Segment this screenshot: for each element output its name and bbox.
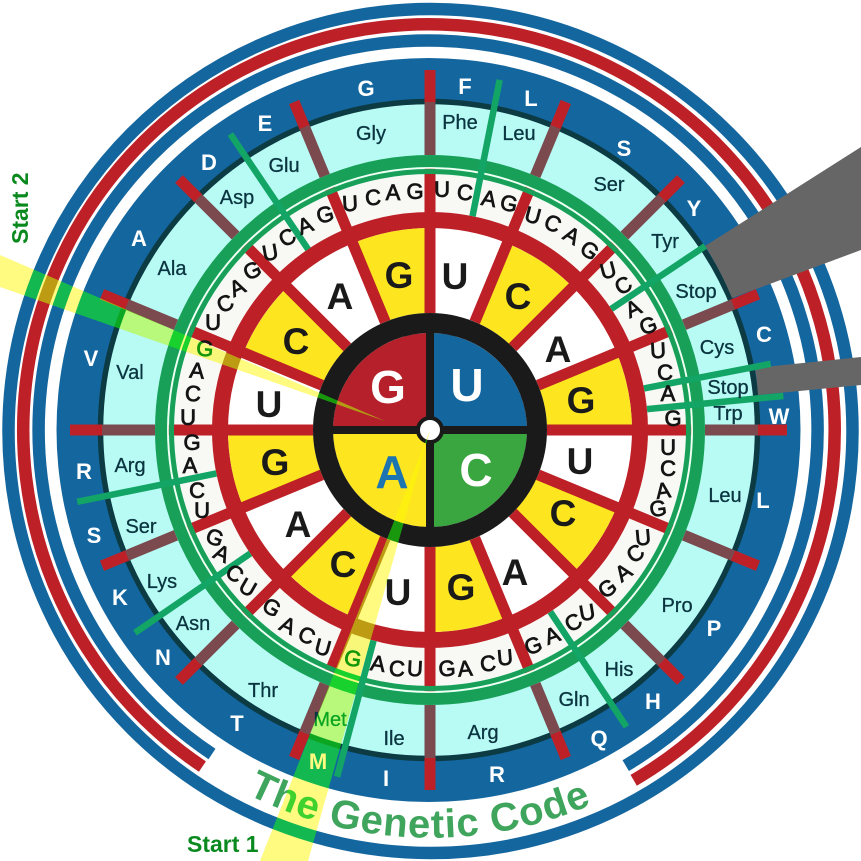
third base codon letters: A xyxy=(541,621,564,650)
single letter amino acid codes: S xyxy=(617,136,631,161)
yellow second base sectors xyxy=(197,197,663,663)
third base codon letters: C xyxy=(657,360,673,385)
amino acid names: Val xyxy=(116,362,144,384)
amino acid names: Arg xyxy=(114,455,146,477)
amino acid names: Tyr xyxy=(651,231,679,253)
third base codon letters: A xyxy=(457,655,474,682)
second base letters: A xyxy=(545,329,571,370)
amino acid names: Met xyxy=(313,709,347,731)
third base codon letters: U xyxy=(194,498,210,523)
third base codon letters: G xyxy=(183,430,201,455)
third base codon letters: U xyxy=(522,201,544,230)
third base codon letters: G xyxy=(593,573,621,604)
third base codon letters: A xyxy=(621,294,645,323)
single letter amino acid codes: W xyxy=(769,404,790,429)
third base codon letters: U xyxy=(434,177,450,202)
third base codon letters: G xyxy=(406,179,424,204)
second base letters: C xyxy=(330,544,356,585)
third base codon letters: A xyxy=(661,381,676,406)
single letter amino acid codes: D xyxy=(201,150,217,175)
single letter amino acid codes: A xyxy=(131,226,147,251)
amino acid names: Glu xyxy=(268,155,300,177)
amino acid names: Ile xyxy=(383,728,405,750)
amino acid names: Stop xyxy=(707,377,749,399)
center letters: A xyxy=(375,446,409,498)
amino acid names: Gln xyxy=(558,689,590,711)
cyan amino acid ring xyxy=(100,102,758,758)
third base codon letters: U xyxy=(406,656,424,681)
amino acid names: Asn xyxy=(176,613,210,635)
second base letters: C xyxy=(283,321,309,362)
center letters: G xyxy=(370,361,406,413)
third base codon letters: G xyxy=(498,189,520,217)
blue amino acid letter ring xyxy=(56,58,800,802)
center letters: C xyxy=(459,444,493,496)
single letter amino acid codes: S xyxy=(87,523,101,548)
third base codon letters: C xyxy=(456,179,474,206)
third base codon letters: G xyxy=(636,311,660,340)
second base letters: U xyxy=(567,441,593,482)
single letter amino acid codes: F xyxy=(458,74,472,99)
amino acid names: Asp xyxy=(220,187,254,209)
third base codon letters: C xyxy=(184,381,202,406)
third base codon letters: G xyxy=(438,656,456,681)
third base codon letters: A xyxy=(183,453,198,478)
third base codon letters: C xyxy=(364,185,382,210)
third base codon letters: G xyxy=(664,406,682,431)
third base codon letters: A xyxy=(369,650,387,677)
second base letters: A xyxy=(327,276,353,317)
third base codon letters: A xyxy=(210,539,234,568)
center black ring and cross xyxy=(318,318,542,542)
amino acid names: Arg xyxy=(467,722,499,744)
third base codon letters: A xyxy=(610,558,637,587)
start 2 beam xyxy=(0,255,385,421)
codon ring xyxy=(174,174,686,686)
third base codon letters: A xyxy=(294,211,317,240)
third base codon letters: C xyxy=(540,209,565,238)
single letter amino acid codes: R xyxy=(76,459,92,484)
amino acid names: Ser xyxy=(125,516,157,538)
second base letters: U xyxy=(385,572,411,613)
single letter amino acid codes: H xyxy=(645,689,661,714)
red spoke tips xyxy=(70,70,787,790)
third base codon letters: C xyxy=(622,539,649,568)
single letter amino acid codes: L xyxy=(756,488,770,513)
title: The Genetic Code xyxy=(255,769,588,838)
second base letters: C xyxy=(505,276,531,317)
second base ring xyxy=(220,220,640,640)
third base codon letters: C xyxy=(189,478,205,503)
third base codon letters: C xyxy=(294,621,319,650)
single letter amino acid codes: P xyxy=(707,616,721,641)
gray wedges xyxy=(705,147,861,395)
second base letters xyxy=(256,255,595,613)
amino acid names: Cys xyxy=(700,337,734,359)
third base codon letters: U xyxy=(312,633,334,662)
third base codon letters: G xyxy=(195,335,215,362)
single letter amino acid codes: Q xyxy=(590,726,608,751)
single letter amino acid codes: Y xyxy=(687,196,702,221)
amino acid names: Leu xyxy=(708,485,742,507)
second base letters: C xyxy=(550,493,576,534)
third base codon letters: U xyxy=(205,310,221,335)
second base letters: U xyxy=(256,384,282,425)
third base codon letters: A xyxy=(386,180,401,205)
third base codon letters: C xyxy=(213,289,238,318)
third base codon letters: C xyxy=(388,656,406,681)
single letter amino acid codes: T xyxy=(230,711,244,736)
amino acid names: Gly xyxy=(356,123,386,145)
third base codon letters: A xyxy=(559,221,585,250)
amino acid names: Trp xyxy=(713,403,743,425)
single letter amino acid codes: L xyxy=(524,86,538,111)
third base codon letters: A xyxy=(276,611,300,640)
third base codon letters: U xyxy=(235,573,261,602)
third base codon letters: A xyxy=(654,477,672,504)
amino acid names: Ser xyxy=(593,174,625,196)
start 1 label: Start 1 xyxy=(187,831,259,857)
green codon split spokes xyxy=(77,80,783,777)
third base codon letters: U xyxy=(260,239,280,266)
third base codon letters: G xyxy=(342,645,364,672)
third base codon letters: C xyxy=(479,650,497,677)
third base codon letters: G xyxy=(576,235,604,266)
third base codon letters: C xyxy=(610,271,636,300)
third base codon letters: G xyxy=(203,523,227,552)
third base codon letters: U xyxy=(577,599,597,626)
second base letters: A xyxy=(502,552,528,593)
single letter amino acid codes: V xyxy=(84,346,99,371)
amino acid names: His xyxy=(605,659,633,681)
single letter amino acid codes xyxy=(76,74,790,791)
single letter amino acid codes: K xyxy=(112,585,128,610)
amino acid names: Lys xyxy=(147,571,177,593)
single letter amino acid codes: I xyxy=(383,766,389,791)
third base codon letters: C xyxy=(660,456,676,481)
amino acid names: Thr xyxy=(248,680,278,702)
third base codon letters: A xyxy=(480,185,499,212)
single letter amino acid codes: C xyxy=(756,322,772,347)
center first base quadrants xyxy=(333,333,527,527)
second base letters: G xyxy=(261,442,289,483)
third base codon letters: U xyxy=(649,338,667,363)
amino acid names: Phe xyxy=(442,112,478,134)
third base codon letters: C xyxy=(274,223,300,252)
start 2 label: Start 2 xyxy=(7,172,33,244)
third base codon letters: A xyxy=(189,357,206,384)
third base codon letters: U xyxy=(597,256,619,285)
single letter amino acid codes: R xyxy=(489,762,505,787)
green double ring xyxy=(161,161,699,699)
third base codon letters: G xyxy=(314,200,337,229)
second base letters: A xyxy=(285,504,311,545)
single letter amino acid codes: M xyxy=(309,749,327,774)
amino acid names: Leu xyxy=(502,123,536,145)
second base letters: G xyxy=(447,567,475,608)
third base codon letters xyxy=(180,177,682,682)
amino acid names xyxy=(114,112,749,750)
center letters xyxy=(370,359,493,498)
single letter amino acid codes: G xyxy=(357,76,375,101)
third base codon letters: A xyxy=(225,273,249,302)
amino acid names: Ala xyxy=(158,258,187,280)
third base codon letters: G xyxy=(521,631,545,660)
second base letters: U xyxy=(442,256,468,297)
third base codon letters: U xyxy=(341,191,359,216)
third base codon letters: C xyxy=(560,608,586,637)
red spokes inner xyxy=(168,168,692,692)
amino acid names: Stop xyxy=(675,281,717,303)
third base codon letters: G xyxy=(258,592,285,623)
single letter amino acid codes: N xyxy=(155,645,171,670)
third base codon letters: G xyxy=(239,256,265,285)
start 1 beam xyxy=(260,430,430,861)
second base letters: G xyxy=(385,255,413,296)
third base codon letters: U xyxy=(496,644,514,671)
third base codon letters: C xyxy=(221,559,248,588)
second base letters: G xyxy=(567,380,595,421)
third base codon letters: G xyxy=(648,495,668,522)
third base codon letters: U xyxy=(634,524,652,551)
amino acid names: Pro xyxy=(661,595,693,617)
single letter amino acid codes: E xyxy=(258,111,272,136)
center letters: U xyxy=(450,359,484,411)
third base codon letters: U xyxy=(180,405,196,430)
brown spoke sections xyxy=(100,100,760,760)
third base codon letters: U xyxy=(660,435,676,460)
